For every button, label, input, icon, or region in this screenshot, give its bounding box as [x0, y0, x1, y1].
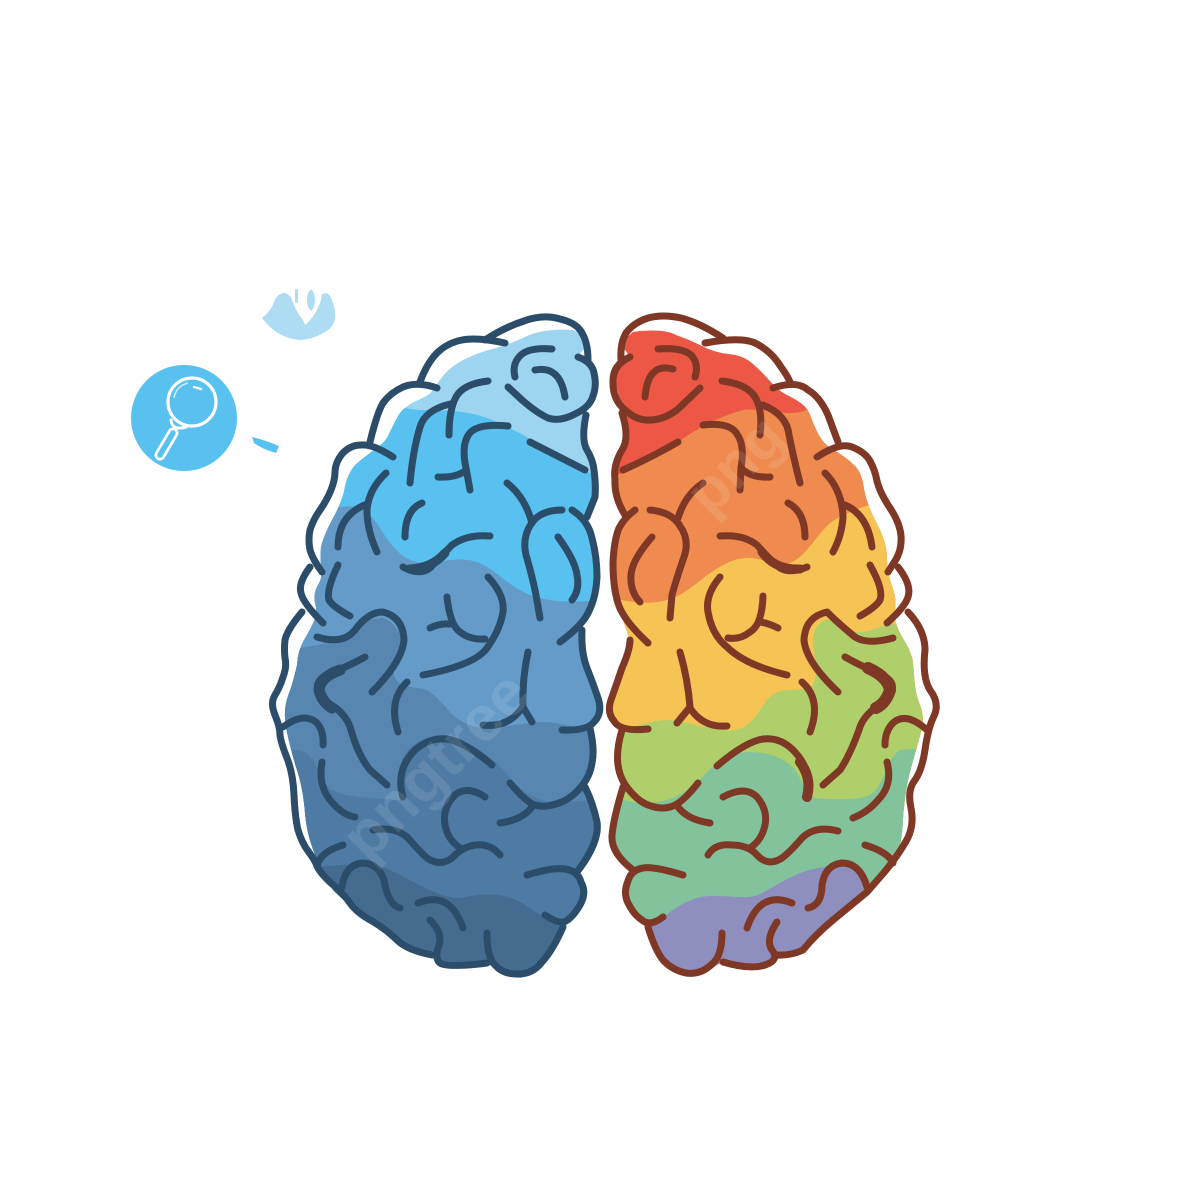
right hemisphere: rainbow brain — [606, 312, 940, 977]
rainbow colour bands — [612, 330, 923, 970]
watermark text on right hemisphere: png — [672, 402, 797, 527]
watermark text on left hemisphere: pngtree — [327, 657, 543, 873]
icon: magnifying glass badge — [131, 365, 237, 471]
blue colour bands — [284, 330, 596, 971]
left outline and folds — [272, 317, 600, 974]
left hemisphere: blue brain — [269, 313, 604, 978]
right outline and folds — [609, 316, 936, 973]
icon: faded lightbulb blob — [262, 289, 335, 340]
icon: small blue dash — [252, 437, 279, 453]
